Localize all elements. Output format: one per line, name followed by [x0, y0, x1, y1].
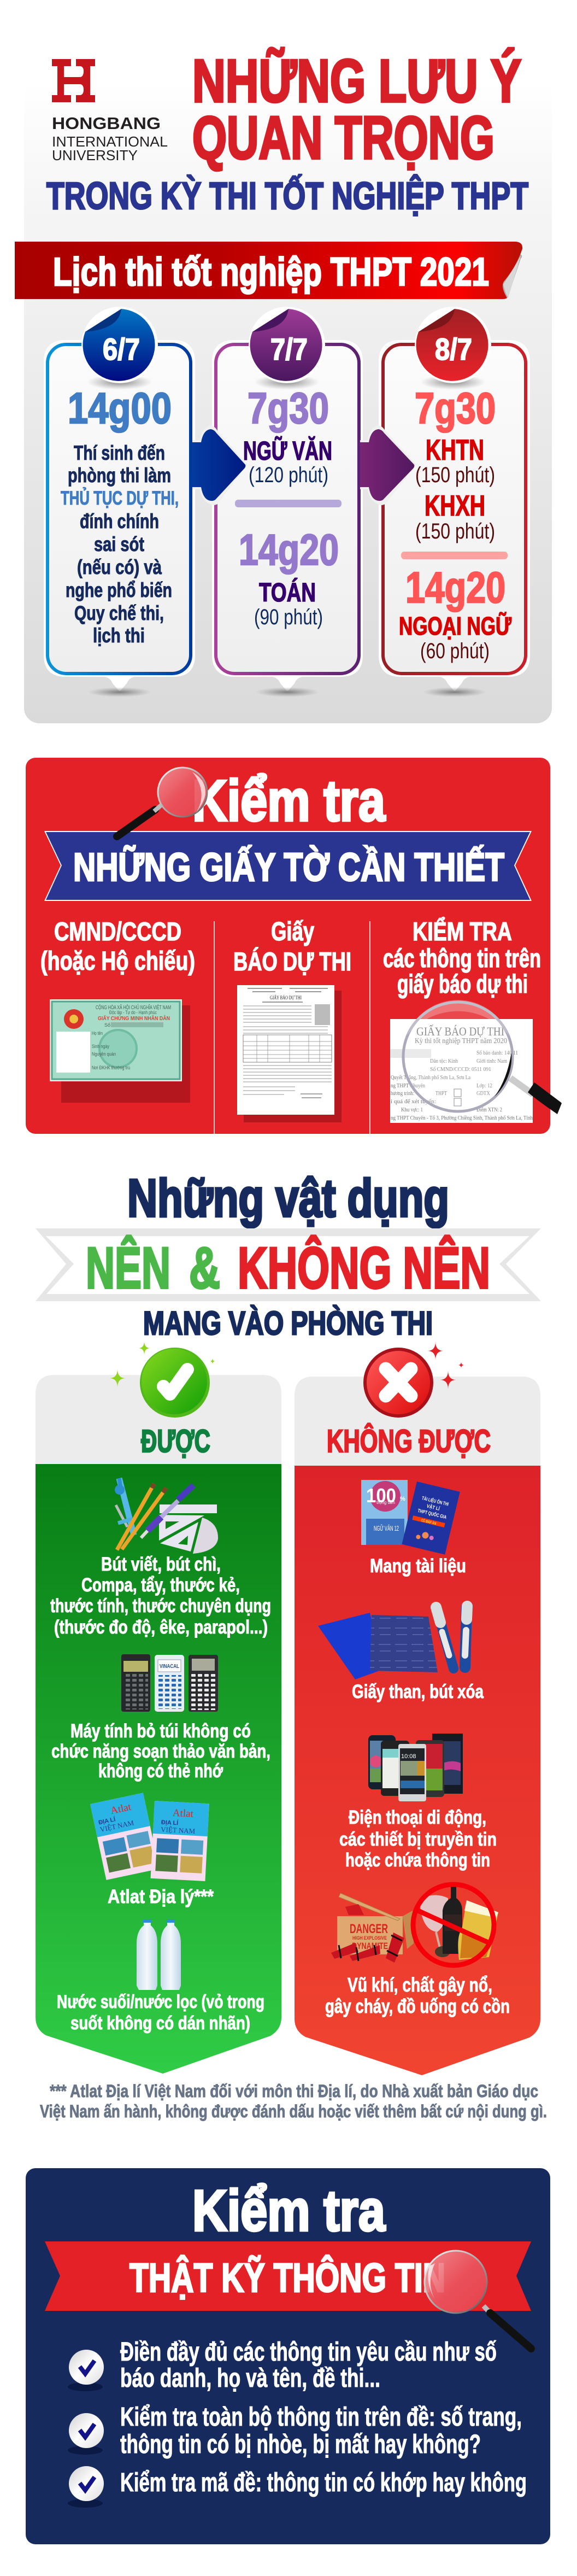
image: exam notice sheet: GIẤY BÁO DỰ THI	[270, 995, 302, 1000]
text: water: suốt không có dán nhãn)	[70, 2013, 250, 2034]
image: study books: 100	[366, 1484, 396, 1507]
text: phones	[339, 1807, 497, 1871]
image: magnified notice: Giới tính: Nam	[476, 1058, 507, 1064]
image: ID card: Nguyên quán	[92, 1051, 116, 1057]
banner: check information	[45, 2241, 531, 2311]
description: lịch thi	[93, 624, 145, 647]
image: ID card: Họ tên	[92, 1031, 103, 1036]
ribbon: should and should not: NÊN	[86, 1235, 170, 1301]
text: pens and rulers: Compa, tẩy, thước kẻ,	[81, 1574, 240, 1596]
duration: (150 phút)	[415, 519, 495, 543]
logo wordmark: HONGBANG	[52, 114, 161, 133]
title	[192, 48, 521, 172]
column: exam notice: BÁO DỰ THI	[233, 947, 351, 976]
image: water bottles	[137, 1919, 181, 1990]
image: atlas books	[90, 1793, 209, 1881]
ribbon: schedule heading	[15, 242, 522, 299]
label: not allowed: KHÔNG ĐƯỢC	[327, 1424, 491, 1459]
image: magnified notice: Số báo danh: 140 11	[476, 1050, 518, 1056]
description: nghe phổ biến	[66, 579, 172, 601]
badge: 8/7	[415, 307, 491, 383]
image: study books: trọng tâm	[376, 1500, 395, 1505]
image: calculators	[121, 1654, 218, 1712]
icon: check	[109, 1341, 215, 1418]
duration: (150 phút)	[415, 463, 495, 487]
icon: magnifier	[425, 2251, 531, 2349]
image: atlas books: Atlat	[109, 1801, 133, 1817]
panel: allowed	[36, 1341, 281, 2074]
duration: (60 phút)	[420, 639, 490, 663]
text: phones: các thiết bị truyền tin	[339, 1829, 497, 1850]
banner: necessary papers	[44, 831, 532, 901]
bullet: check exam code	[68, 2466, 527, 2508]
image: ID card: Độc lập - Tự do - Hạnh phúc	[109, 1010, 157, 1015]
time: 14g00	[68, 384, 172, 432]
ribbon: should and should not: &	[189, 1235, 220, 1301]
image: carbon paper and correction pens	[318, 1606, 467, 1679]
arrow: 6/7 to 7/7	[192, 425, 248, 505]
description: sai sót	[94, 533, 144, 555]
image: ID card: Số	[104, 1022, 110, 1028]
image: stationery	[115, 1478, 218, 1554]
text: water	[57, 1992, 264, 2034]
icon: big magnifier	[403, 1000, 562, 1114]
description: Quy chế thi,	[74, 602, 164, 624]
subject: Ngoại ngữ: NGOẠI NGỮ	[399, 612, 512, 640]
heading: Kiểm tra: Kiểm tra	[192, 769, 386, 833]
image: study books	[361, 1480, 460, 1555]
column: ID card	[40, 917, 195, 1103]
image: study books: %	[400, 1496, 405, 1502]
text: pens and rulers: Bút viết, bút chì,	[101, 1554, 221, 1575]
image: atlas books: VIỆT NAM	[99, 1818, 135, 1834]
image: atlas books: Atlat	[172, 1807, 194, 1820]
duration: (90 phút)	[254, 605, 323, 629]
logo wordmark: INTERNATIONAL	[52, 133, 168, 150]
bullet: fill in information: báo danh, họ và tên, đề thi...	[120, 2364, 380, 2393]
duration: (120 phút)	[249, 463, 328, 487]
description: Thí sinh đến	[74, 442, 165, 464]
text: pens and rulers	[50, 1554, 271, 1638]
image: exam notice sheet	[237, 985, 334, 1115]
bullet: check all information	[68, 2403, 522, 2459]
image: magnified notice	[390, 1000, 562, 1123]
card: 8/7	[379, 340, 530, 697]
text: calculators: không có thẻ nhớ	[98, 1760, 223, 1782]
image: magnified notice: Quyết Thắng, Thành phố Sơn La, Sơn La	[391, 1074, 470, 1081]
image: ID card: CỘNG HÒA XÃ HỘI CHỦ NGHĨA VIỆT NAM	[96, 1004, 171, 1011]
image: magnified notice: i quả để xét tuyển:	[391, 1098, 436, 1105]
label: allowed: ĐƯỢC	[141, 1424, 210, 1459]
badge: 7/7: 7/7	[270, 332, 308, 366]
image: study books: THPT QUỐC GIA	[417, 1507, 448, 1520]
text: explosives: Vũ khí, chất gây nổ,	[348, 1974, 492, 1996]
image: magnified notice: Kỳ thi tốt nghiệp THPT năm 2020	[415, 1037, 507, 1045]
time: morning: 7g30	[415, 384, 496, 432]
column: exam notice	[233, 917, 351, 1122]
badge: 7/7	[249, 307, 325, 383]
text: pens and rulers: (thước đo độ, êke, parapol...)	[54, 1617, 268, 1638]
image: study books: VẬT LÍ	[426, 1503, 440, 1512]
badge: 6/7: 6/7	[103, 332, 140, 366]
subject: Toán: TOÁN	[259, 578, 316, 607]
text: water: Nước suối/nước lọc (vỏ trong	[57, 1992, 264, 2012]
subject: Ngữ văn: NGỮ VĂN	[243, 436, 332, 466]
column: ID card: (hoặc Hộ chiếu)	[40, 947, 195, 976]
text: calculators: chức năng soạn thảo văn bản,	[51, 1741, 270, 1762]
image: study books: NGỮ VĂN 12	[374, 1524, 399, 1532]
image: magnified notice: hương trình:	[391, 1090, 414, 1097]
image: ID card: GIẤY CHỨNG MINH NHÂN DÂN	[98, 1015, 170, 1022]
heading: items: Những vật dụng	[127, 1168, 449, 1228]
divider	[235, 500, 342, 507]
image: magnified notice: THPT	[435, 1090, 447, 1097]
badge: 8/7: 8/7	[435, 332, 472, 366]
image: magnified notice: Điểm XTN: 2	[476, 1106, 502, 1113]
description: đính chính	[80, 510, 159, 532]
text: atlas: Atlat Địa lý***	[108, 1886, 214, 1907]
column: check notice details: giấy báo dự thi	[397, 969, 528, 998]
divider	[401, 552, 508, 559]
icon: magnifier	[117, 768, 207, 836]
column: ID card: CMND/CCCD	[54, 917, 181, 946]
image: ID card: Nơi ĐKHK thường trú	[92, 1065, 130, 1070]
panel: check exam paper	[26, 2168, 550, 2544]
text: phones: hoặc chứa thông tin	[345, 1849, 490, 1871]
card: 6/7	[44, 340, 195, 697]
icon: no alcohol sign	[413, 1884, 498, 1965]
image: magnified notice: Lớp: 12	[476, 1082, 492, 1089]
time: afternoon: 14g20	[405, 563, 505, 612]
text: explosives	[325, 1974, 510, 2017]
panel: not allowed	[295, 1342, 540, 2075]
text: phones: Điện thoại di động,	[349, 1807, 486, 1828]
image: ID card	[50, 999, 182, 1081]
subheading: MANG VÀO PHÒNG THI	[143, 1305, 433, 1342]
text: documents: Mang tài liệu	[370, 1555, 466, 1577]
panel: required documents	[26, 758, 562, 1134]
image: study books: TÀI LIỆU ÔN THI	[421, 1495, 449, 1507]
banner: check information: THẬT KỸ THÔNG TIN	[129, 2255, 445, 2300]
logo wordmark: UNIVERSITY	[52, 147, 138, 163]
column: check notice details: KIỂM TRA	[413, 917, 512, 946]
image: atlas books: VIỆT NAM	[161, 1825, 196, 1835]
column dividers	[214, 921, 370, 1134]
logo: Hong Bang International University	[52, 59, 168, 163]
column: exam notice: Giấy	[271, 917, 314, 946]
image: magnified notice: GDTX	[476, 1090, 490, 1097]
text: calculators	[51, 1720, 270, 1782]
description: phòng thi làm	[68, 464, 171, 487]
card: 7/7	[212, 340, 363, 697]
image: explosives crate	[331, 1893, 414, 1963]
time: afternoon: 14g20	[239, 525, 339, 574]
image: explosives crate: DANGER	[350, 1922, 388, 1936]
description	[61, 442, 179, 647]
image: magnified notice: Khu vực: 1	[401, 1106, 423, 1113]
time: morning: 7g30	[248, 384, 329, 432]
image: study books: CÓ ĐÁP ÁN	[421, 1518, 437, 1526]
text: pens and rulers: thước tính, thước chuyên dụng	[50, 1595, 271, 1617]
panel: exam schedule	[24, 80, 552, 723]
image: ID card: Sinh ngày	[92, 1044, 109, 1049]
subject: KHXH: KHXH	[425, 490, 485, 522]
image: magnified notice: GIẤY BÁO DỰ THI	[416, 1024, 504, 1038]
icon: H monogram	[52, 59, 95, 102]
image: atlas books: ĐỊA LÍ	[161, 1819, 179, 1826]
subject: KHTN: KHTN	[426, 434, 484, 466]
image: magnified notice: ng THPT Chuyên	[391, 1082, 425, 1089]
heading: Kiểm tra: Kiểm tra	[192, 2179, 386, 2243]
ribbon: should and should not	[36, 1228, 541, 1301]
image: magnified notice: Dân tộc: Kinh	[430, 1058, 458, 1064]
image: explosives crate: DYNAMITE	[352, 1941, 388, 1951]
arrow: 7/7 to 8/7	[360, 425, 416, 505]
image: phones	[368, 1734, 463, 1801]
badge: 6/7	[81, 307, 158, 383]
image: phones: 10:08	[401, 1753, 416, 1760]
icon: cross	[363, 1342, 464, 1418]
image: explosives crate: HIGH EXPLOSIVE	[352, 1935, 387, 1941]
image: calculators: VINACAL	[160, 1664, 179, 1670]
column: check notice details	[383, 917, 562, 1123]
bullet: fill in information	[68, 2338, 497, 2393]
image: atlas books: ĐỊA LÍ	[98, 1816, 116, 1826]
image: magnified notice: Số CMND/CCCD: 0511 091	[430, 1066, 491, 1073]
logo wordmark	[52, 114, 168, 163]
text: calculators: Máy tính bỏ túi không có	[70, 1720, 251, 1742]
description: (nếu có) và	[77, 556, 162, 578]
description: THỦ TỤC DỰ THI,	[61, 487, 179, 509]
footnote	[40, 2081, 547, 2121]
text: explosives: gây cháy, đồ uống có cồn	[325, 1995, 510, 2017]
text: carbon paper: Giấy than, bút xóa	[352, 1681, 484, 1702]
image: magnified notice: ng THPT Chuyên - Tổ 3, Phường Chiềng Sinh, Thành phố Sơn La, Tỉnh	[391, 1115, 533, 1121]
